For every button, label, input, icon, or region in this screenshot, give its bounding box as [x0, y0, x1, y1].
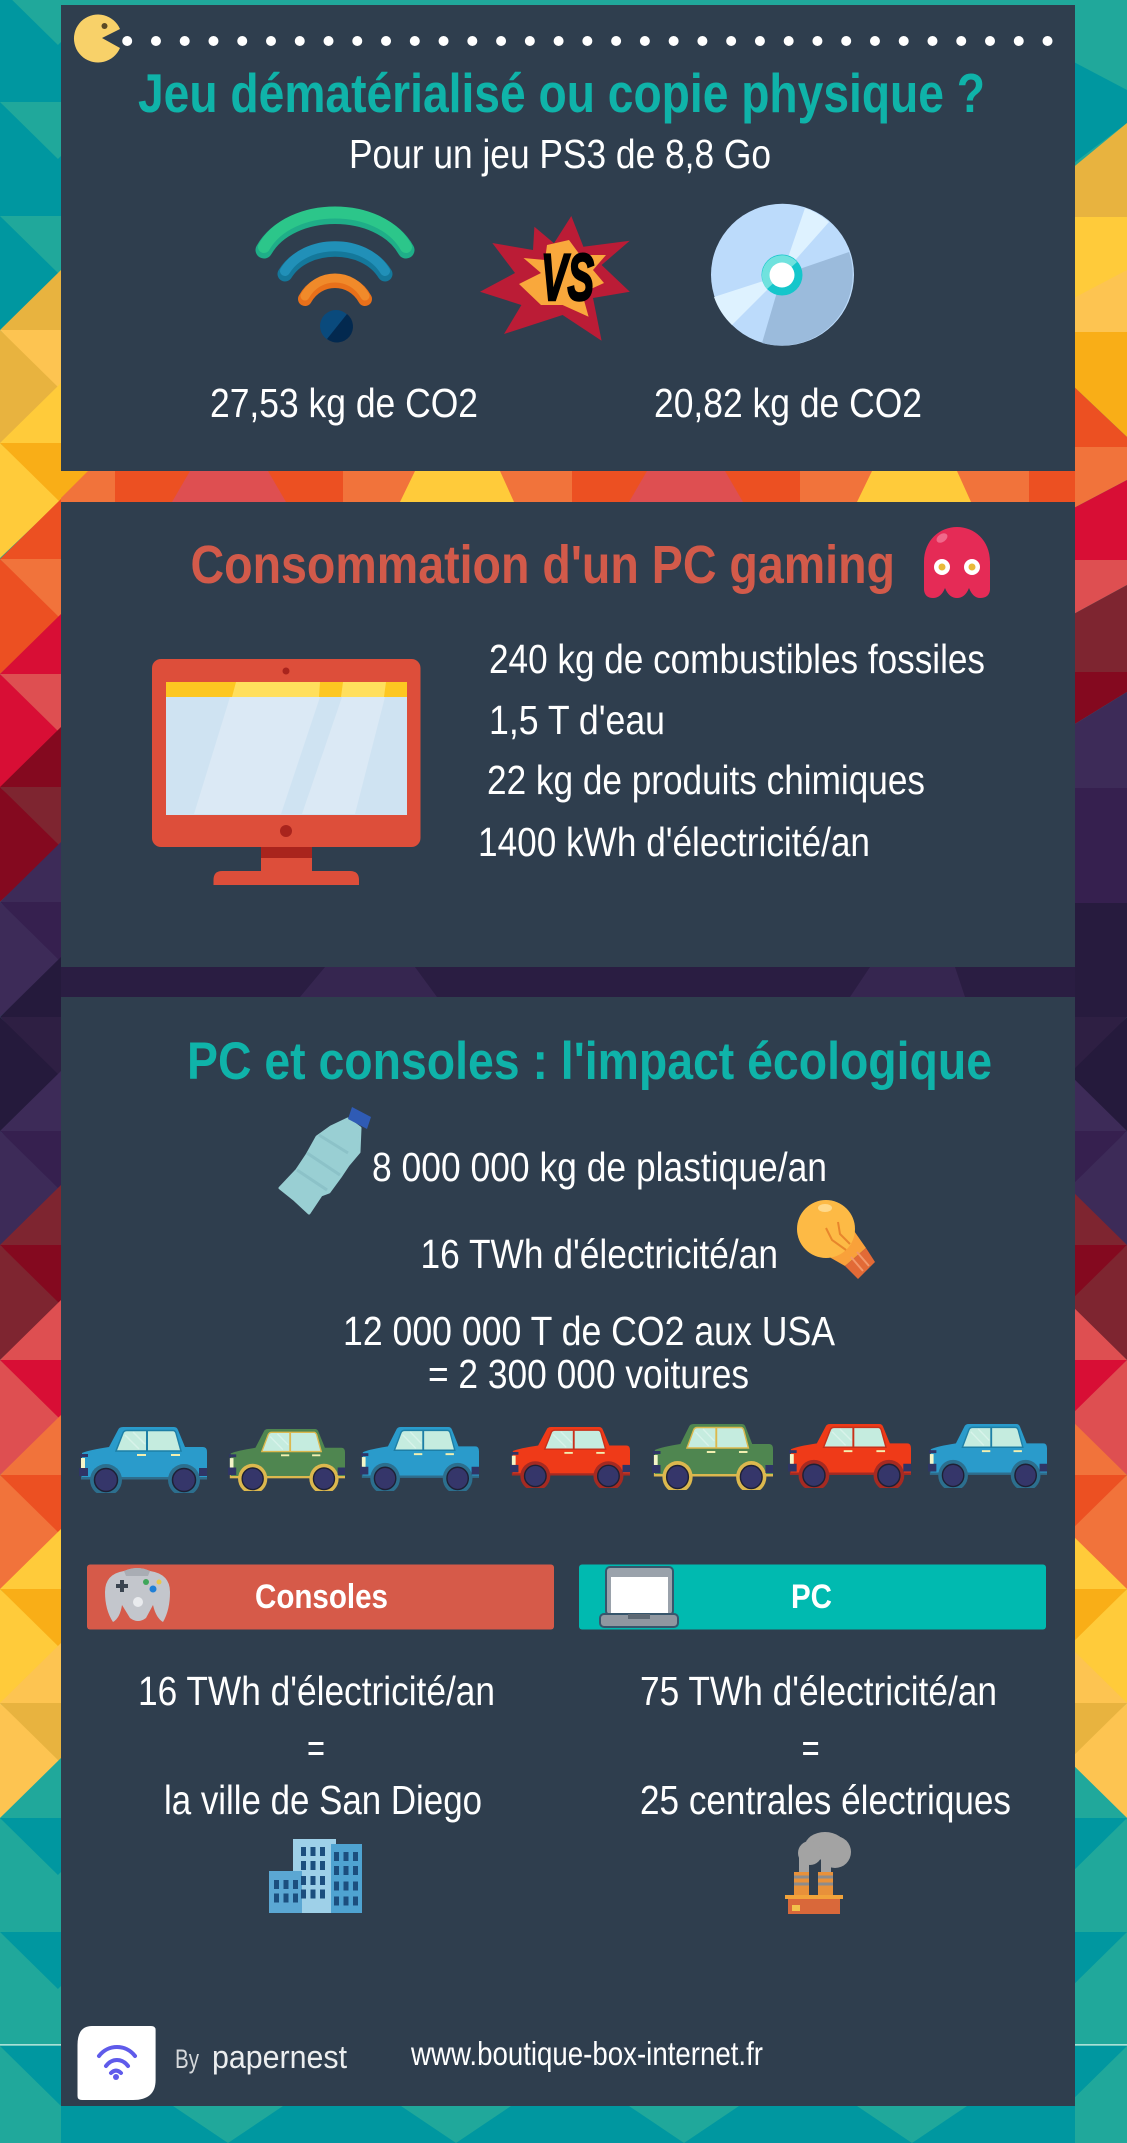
stat: electricity: 1400 kWh d'électricité/an	[478, 819, 870, 865]
stat: fossil fuels: 240 kg de combustibles fossiles	[489, 636, 985, 682]
header bar: consoles	[87, 1564, 554, 1630]
panel: gaming PC consumption	[61, 502, 1075, 967]
icon: plastic bottle	[280, 1107, 371, 1213]
stat: chemicals: 22 kg de produits chimiques	[487, 757, 925, 803]
website url: www.boutique-box-internet.fr	[410, 2035, 763, 2072]
stat: plastic: 8 000 000 kg de plastique/an	[372, 1144, 827, 1190]
header bar: PC	[579, 1564, 1046, 1630]
header bar: PC: PC	[791, 1578, 832, 1616]
icon: laptop	[600, 1567, 678, 1627]
consoles equals sign: =	[307, 1725, 325, 1771]
row of cars	[79, 1424, 1047, 1496]
icon: pacman	[74, 15, 120, 62]
stat: CO2 in USA: 12 000 000 T de CO2 aux USA	[343, 1308, 836, 1354]
panel: PC and consoles ecological impact	[61, 997, 1075, 2106]
icon: power plant	[785, 1832, 851, 1914]
icon: monitor	[152, 659, 420, 885]
icon: light bulb	[797, 1200, 875, 1279]
stat: equivalent cars: = 2 300 000 voitures	[428, 1351, 749, 1397]
icon: wifi	[264, 212, 406, 342]
consoles comparison: la ville de San Diego	[164, 1777, 482, 1823]
label: download CO2: 27,53 kg de CO2	[210, 380, 478, 426]
heading: PC et consoles : l'impact écologique	[187, 1032, 992, 1091]
dotted line of pellets	[127, 36, 1050, 46]
icon: city buildings	[269, 1839, 362, 1913]
icon: disc	[711, 204, 854, 346]
stat: electricity: 16 TWh d'électricité/an	[420, 1231, 778, 1277]
label: physical copy CO2: 20,82 kg de CO2	[654, 380, 922, 426]
panel background	[61, 997, 1075, 2106]
panel: download vs physical copy	[61, 5, 1075, 471]
PC electricity: 75 TWh d'électricité/an	[640, 1668, 997, 1714]
PC equals sign: =	[802, 1725, 820, 1771]
subtitle: Pour un jeu PS3 de 8,8 Go	[349, 131, 771, 177]
PC comparison: 25 centrales électriques	[640, 1777, 1011, 1823]
logo: papernest badge	[78, 2026, 156, 2100]
panel background	[61, 502, 1075, 967]
icon: game controller	[105, 1568, 170, 1622]
icon: versus burst: VS	[541, 240, 594, 314]
title: Jeu dématérialisé ou copie physique ?	[138, 62, 985, 124]
logo: by papernest: By	[175, 2044, 199, 2074]
heading: Consommation d'un PC gaming	[190, 535, 895, 595]
panel background	[61, 5, 1075, 471]
icon: versus burst	[480, 216, 630, 341]
consoles electricity: 16 TWh d'électricité/an	[138, 1668, 495, 1714]
icon: ghost	[924, 527, 990, 598]
stat: water: 1,5 T d'eau	[489, 697, 665, 743]
header bar: consoles: Consoles	[255, 1578, 388, 1616]
logo: by papernest: papernest	[212, 2039, 347, 2075]
